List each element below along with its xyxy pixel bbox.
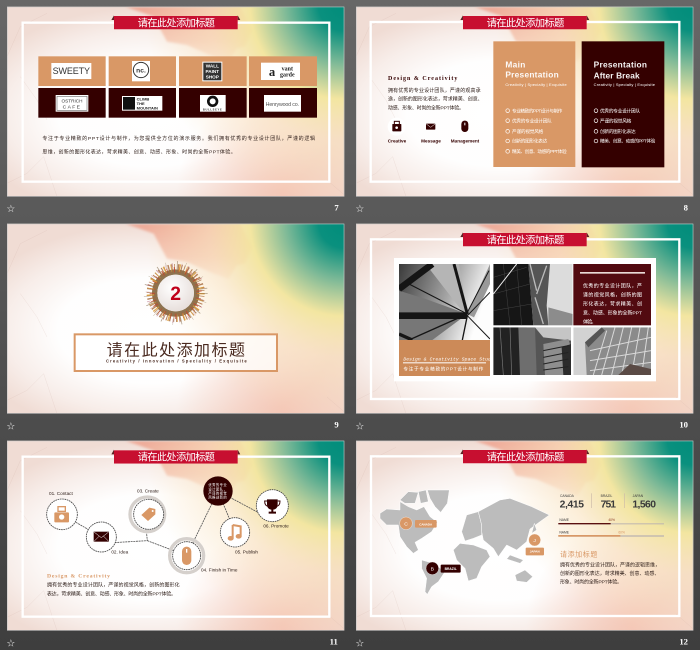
page number: 9 bbox=[334, 419, 339, 429]
title banner bbox=[460, 232, 589, 246]
title banner: 请在此处添加标题 bbox=[487, 450, 564, 463]
slide 11: process flow bbox=[6, 441, 344, 650]
slide background bbox=[356, 224, 693, 414]
logo tile: ostrich cafe: OSTRICH bbox=[62, 98, 82, 103]
step labels: 04. Finish in Time bbox=[201, 568, 238, 573]
footer star: ☆ bbox=[6, 422, 15, 433]
caption block bbox=[399, 340, 497, 376]
title banner bbox=[460, 449, 589, 463]
paragraph: 拥有优秀的专业设计团队，严谨的视觉风格，创新的图形化 bbox=[47, 582, 180, 589]
node 05 dark text bubble bbox=[203, 476, 233, 506]
node 05 dark text bubble: 优秀的专业 bbox=[208, 482, 227, 487]
logo tile: Sweety: SWEETY bbox=[53, 66, 90, 76]
section title box: 请在此处添加标题 bbox=[107, 341, 245, 359]
pin: Japan: J bbox=[533, 538, 536, 544]
logo tile: climb the mountain: MOUNTAIN bbox=[137, 105, 158, 110]
pin: Brazil: B bbox=[431, 566, 435, 572]
icon labels: Message bbox=[421, 138, 441, 143]
body text: 专注于专业精致的PPT设计与制作，为您提供全方位的演示服务。我们拥有优秀的专业设计团队，严谨的逻辑 bbox=[42, 135, 315, 142]
paragraph bbox=[388, 87, 483, 111]
body text: 思维，创新的图形化表达，苛求精美、创意、动感、形象、时尚的全新PPT体验。 bbox=[42, 149, 236, 156]
logo tile: avant garde: a bbox=[269, 65, 276, 79]
logo tile: nc: nc. bbox=[136, 67, 146, 74]
footer star: ☆ bbox=[355, 422, 364, 433]
node 07 promote bbox=[256, 490, 288, 522]
logo tile: wall paint shop: WALL bbox=[206, 64, 219, 69]
logo tile: climb the mountain bbox=[109, 88, 176, 118]
slide 7: logos bbox=[6, 7, 344, 215]
logo tile: henrywood bbox=[249, 88, 317, 118]
footer star: ☆ bbox=[6, 639, 15, 650]
paragraph: 形象、时尚的全新PPT体验。 bbox=[560, 579, 622, 586]
photo: office block bbox=[574, 327, 651, 375]
dark text panel: 优秀的专业设计团队，严 bbox=[583, 283, 642, 290]
panel: main presentation: 创新的图形化表达 bbox=[512, 138, 548, 145]
footer star: ☆ bbox=[6, 204, 15, 215]
page number: 12 bbox=[679, 637, 688, 647]
title banner: 请在此处添加标题 bbox=[487, 233, 564, 246]
heading: Design & Creativity bbox=[388, 76, 457, 82]
panel: main presentation bbox=[493, 41, 575, 167]
slide background bbox=[356, 441, 693, 631]
logo tile: nc bbox=[109, 56, 176, 86]
icon: creative bag bbox=[388, 118, 406, 136]
stat: Canada bbox=[560, 494, 584, 511]
stat: Brazil bbox=[601, 494, 616, 511]
logo tile: avant garde: vant bbox=[282, 67, 293, 73]
panel: presentation after break: 创新的图形化表达 bbox=[600, 128, 636, 135]
node 04 finish in time bbox=[170, 539, 204, 573]
burst emblem with number bbox=[148, 265, 204, 321]
world map bbox=[380, 490, 549, 594]
progress bar 40%: NAME bbox=[559, 518, 570, 522]
panel: presentation after break: After Break bbox=[594, 70, 640, 80]
dark text panel: 谨的视觉风格，创新的图 bbox=[583, 292, 642, 299]
progress bar 60%: NAME bbox=[559, 530, 570, 534]
stat: Japan: JAPAN bbox=[633, 494, 644, 498]
node 05 dark text bubble: 严谨的视觉 bbox=[208, 491, 227, 496]
progress bar 60%: 60% bbox=[618, 530, 625, 534]
caption block: Design & Creativity Space Studio bbox=[403, 357, 497, 363]
dark text panel: 形化表达，苛求精美、创 bbox=[583, 301, 642, 308]
title banner bbox=[111, 450, 240, 464]
panel: presentation after break: 精美、创意、动感的PPT体验 bbox=[600, 138, 656, 145]
title banner: 请在此处添加标题 bbox=[138, 451, 215, 464]
paragraph: 创新的图形化表达，苛求精美、创意、动感、 bbox=[560, 570, 659, 577]
logo tile: Sweety bbox=[38, 56, 106, 86]
step labels: 06. Promote bbox=[263, 523, 289, 528]
pin: Canada: C bbox=[404, 521, 408, 527]
panel: presentation after break: 优秀的专业设计团队 bbox=[600, 107, 640, 114]
page number: 8 bbox=[684, 202, 689, 212]
slide 9: section divider bbox=[6, 224, 344, 433]
section title box bbox=[75, 334, 277, 371]
heading: Design & Creativity bbox=[47, 574, 110, 580]
caption block: 专注于专业精致的PPT设计与制作 bbox=[403, 365, 484, 372]
stat: Brazil: BRAZIL bbox=[601, 494, 612, 498]
panel: presentation after break: Presentation bbox=[594, 60, 647, 70]
white frame bbox=[371, 22, 679, 182]
step labels: 05. Publish bbox=[235, 549, 258, 554]
stat: Japan: 1,560 bbox=[632, 500, 656, 511]
icon: management mouse bbox=[461, 121, 468, 132]
logo tile: bullseye: BULLSEYE bbox=[203, 108, 222, 112]
panel: main presentation: Main bbox=[505, 60, 525, 70]
text heading: 请添加标题 bbox=[560, 550, 597, 559]
logo tile: henrywood: Henrywood co. bbox=[266, 102, 299, 108]
title banner bbox=[460, 15, 589, 29]
paragraph: 拥有优秀的专业设计团队，严谨的观高承 bbox=[388, 87, 481, 94]
stat: Japan bbox=[632, 494, 656, 511]
pin: Japan bbox=[526, 534, 544, 555]
logo grid bbox=[38, 56, 317, 118]
stat: Canada: 2,415 bbox=[560, 500, 584, 511]
logo tile: ostrich cafe: CAFE bbox=[63, 104, 81, 110]
white frame bbox=[23, 457, 329, 617]
slide 12: world map and stats bbox=[355, 441, 693, 650]
body text bbox=[42, 135, 315, 156]
pin: Canada: CANADA bbox=[419, 522, 433, 526]
step labels: 02. Idea bbox=[111, 549, 129, 554]
logo tile: wall paint shop: PAINT bbox=[206, 69, 219, 74]
pin: Brazil bbox=[426, 562, 461, 575]
page number: 11 bbox=[330, 637, 338, 647]
icon labels bbox=[388, 138, 480, 143]
paragraph: 拥有优秀的专业设计团队，严谨的逻辑思维， bbox=[560, 561, 660, 568]
panel: main presentation: Creativity | Specialty | Exquisite bbox=[505, 82, 567, 87]
title banner: 请在此处添加标题 bbox=[487, 16, 564, 29]
icon: message bbox=[426, 124, 435, 130]
step labels bbox=[49, 489, 289, 573]
slide background bbox=[356, 7, 693, 197]
logo tile: climb the mountain: THE bbox=[137, 101, 145, 106]
pin: Canada bbox=[400, 517, 437, 530]
burst emblem with number: 2 bbox=[170, 284, 181, 305]
photo: street towers bbox=[493, 327, 571, 375]
connector lines bbox=[62, 491, 272, 556]
paragraph bbox=[47, 582, 180, 598]
logo tile: wall paint shop bbox=[179, 56, 247, 86]
step labels: 01. Contact bbox=[49, 491, 74, 496]
white frame bbox=[23, 23, 329, 182]
slide background bbox=[7, 441, 344, 631]
dark text panel bbox=[573, 264, 651, 326]
footer star: ☆ bbox=[355, 639, 364, 650]
stat: Canada: CANADA bbox=[560, 494, 575, 498]
node 01 contact bbox=[47, 499, 77, 530]
panel: main presentation: 专业精致的PPT设计与制作 bbox=[512, 107, 563, 114]
icon labels: Creative bbox=[388, 138, 407, 143]
photo: towers and sky bbox=[493, 264, 573, 326]
node 02 idea bbox=[86, 522, 116, 552]
slide background bbox=[7, 224, 344, 414]
stat: Brazil: 751 bbox=[601, 500, 616, 511]
step labels: 03. Create bbox=[137, 489, 159, 494]
pin: Brazil: BRAZIL bbox=[445, 567, 457, 571]
progress bar 40% bbox=[558, 518, 664, 524]
slide 8: main presentation bbox=[355, 7, 693, 215]
logo tile: ostrich cafe bbox=[38, 88, 106, 118]
panel: presentation after break: Creativity | Specialty | Exquisite bbox=[594, 82, 656, 87]
node 05 dark text bubble: 风格创新的 bbox=[208, 495, 227, 500]
dark text panel: 体验。 bbox=[583, 319, 596, 326]
panel: presentation after break bbox=[582, 41, 664, 167]
pin: Japan: JAPAN bbox=[530, 550, 540, 554]
progress bar 40%: 40% bbox=[608, 518, 615, 522]
node 06 publish bbox=[220, 518, 250, 547]
white frame bbox=[371, 456, 679, 616]
footer star: ☆ bbox=[355, 204, 364, 215]
paragraph: 逸，创新的图形化表达，苛求精美、创意、 bbox=[388, 96, 483, 103]
title banner: 请在此处添加标题 bbox=[138, 16, 215, 29]
section title box: Creativity / Innovation / Speciality / Exquisite bbox=[106, 358, 247, 363]
photo: glass building upward bbox=[399, 264, 490, 340]
panel: main presentation: Presentation bbox=[505, 70, 559, 80]
panel: main presentation: 严谨的视觉风格 bbox=[512, 128, 544, 135]
node 03 create bbox=[130, 497, 165, 532]
slide background bbox=[7, 7, 344, 197]
paragraph: 动感、形象、时尚的全新PPT体验。 bbox=[388, 104, 464, 111]
progress bar 60% bbox=[558, 530, 664, 537]
node 05 dark text bubble: 设计团队， bbox=[208, 486, 227, 491]
dark text panel: 意、动感、形象的全新PPT bbox=[583, 310, 642, 317]
icon labels: Management bbox=[451, 138, 480, 143]
white collage panel bbox=[394, 258, 656, 381]
white frame bbox=[371, 239, 679, 399]
title banner bbox=[111, 15, 240, 29]
logo tile: bullseye bbox=[179, 88, 247, 118]
logo tile: avant garde bbox=[249, 56, 317, 86]
paragraph bbox=[560, 561, 660, 586]
logo tile: climb the mountain: CLIMB bbox=[137, 97, 149, 102]
logo tile: wall paint shop: SHOP bbox=[206, 74, 219, 79]
paragraph: 表达，苛求精美、创意、动感、形象、时尚的全新PPT体验。 bbox=[47, 591, 176, 598]
panel: main presentation: 优秀的专业设计团队 bbox=[512, 117, 552, 124]
page number: 7 bbox=[334, 202, 339, 212]
logo tile: avant garde: garde bbox=[280, 73, 295, 79]
panel: main presentation: 精美、创意、动感的PPT体验 bbox=[512, 148, 567, 155]
page number: 10 bbox=[679, 420, 688, 430]
panel: presentation after break: 严谨的视觉风格 bbox=[600, 117, 632, 124]
slide 10: photo collage bbox=[355, 224, 693, 433]
